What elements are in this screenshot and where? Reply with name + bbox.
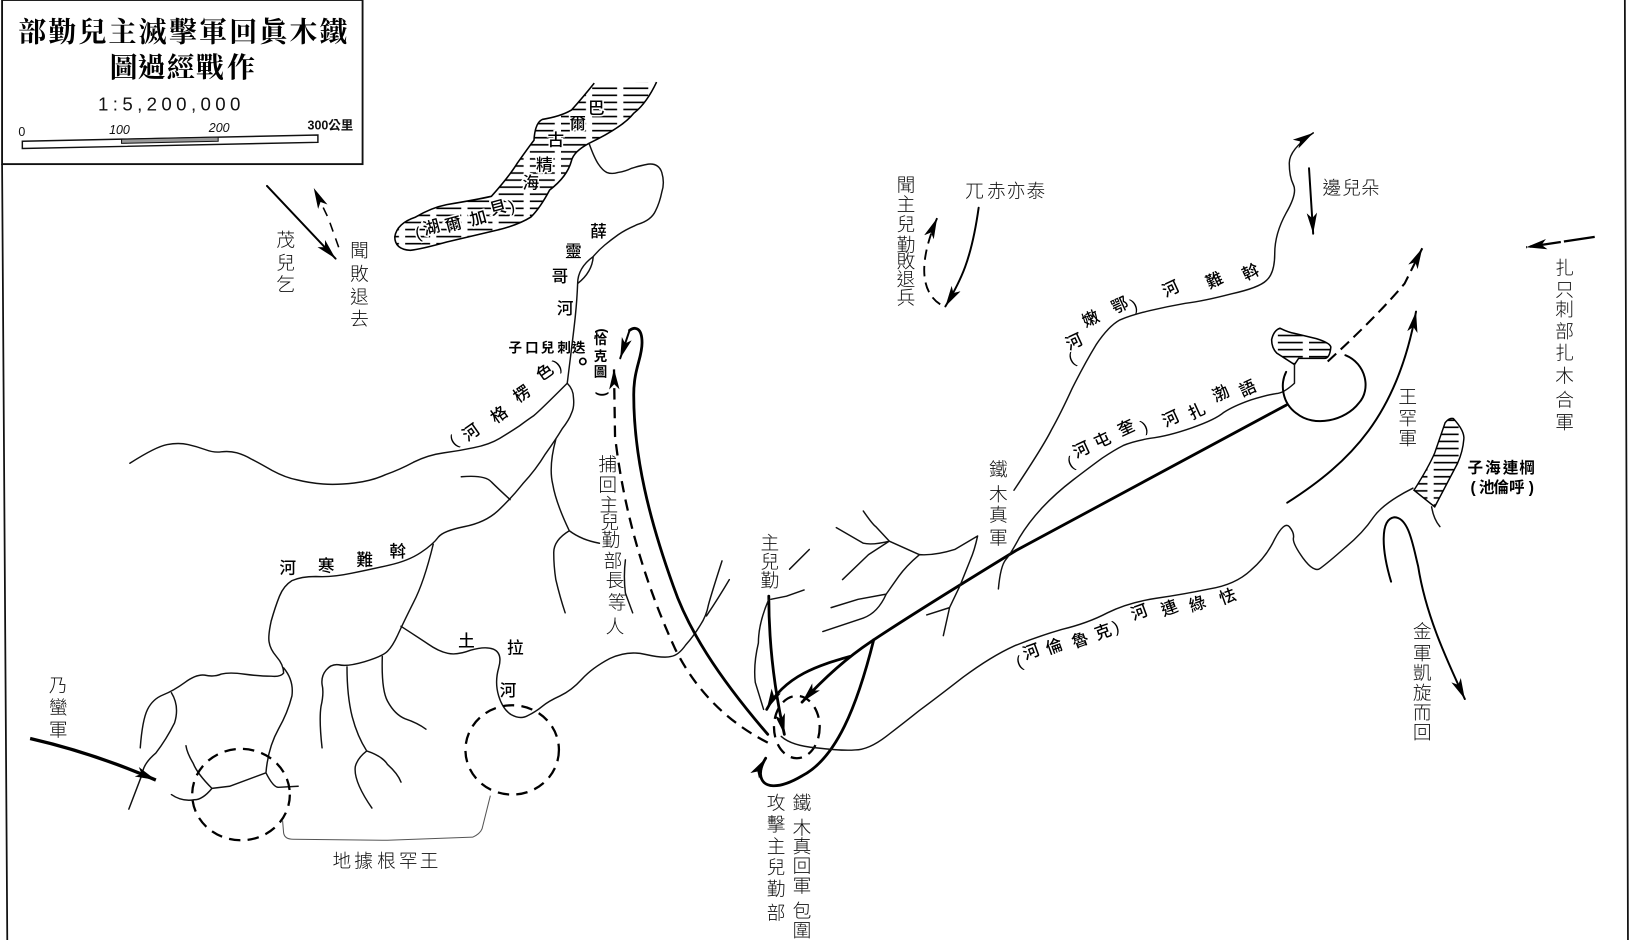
- arrow: pursuit returning with Jurkin chiefs: [598, 328, 768, 743]
- arrow: Wang Khan army: [1287, 312, 1417, 503]
- label: Jurkin: 主兒勤: [760, 533, 779, 591]
- label: Onon Han river name: 斡難寒河: [279, 542, 407, 578]
- label: Jamukha army: 扎只刺部扎木合軍: [1555, 257, 1574, 433]
- heading: map title line one: 部勤兒主滅擊軍回眞木鐵: [18, 17, 348, 49]
- river: Selenga: [130, 143, 663, 484]
- arrow: Temujin army main advance: [802, 405, 1286, 702]
- river: Kherlen: [781, 488, 1413, 750]
- place label: Kyakhta and Deliun Boldog: 子口兒刺迭: [509, 339, 586, 355]
- label: captured Jurkin chiefs: 捕回主兒勤部長等人: [598, 454, 626, 637]
- label: Onon river: (河嫩鄂)河難斡: [1063, 260, 1263, 369]
- scale bar: [18, 119, 353, 149]
- river: Tula: [401, 561, 729, 717]
- panel: title and scale: [2, 0, 363, 164]
- arrows: Taichiut advance and retreat: [897, 174, 1045, 309]
- arrow: Naiman army: [30, 675, 156, 780]
- scale bar: 200: [208, 121, 230, 135]
- arrow: Jin army triumphant return: [1384, 517, 1465, 743]
- place label: Kyakhta and Deliun Boldog: [509, 329, 610, 396]
- label: Tula river name: 土拉河: [458, 631, 524, 700]
- label: Merkit: 茂兒乞: [276, 229, 295, 295]
- label: Wang Khan base: 地據根罕王: [332, 851, 438, 872]
- label: retreat on hearing of Jurkin defeat: 聞主兒勤敗退兵: [897, 174, 916, 309]
- lake: Hulun: [1414, 418, 1535, 527]
- label: lake name: [413, 99, 605, 243]
- text: map scale ratio: 1:5,200,000: [98, 93, 245, 114]
- arrows: Merkit advance and retreat: [267, 186, 369, 329]
- label: Bo'orchu river: (河屯奎)河扎渤語: [1064, 376, 1260, 472]
- label: Temujin returned and encircled: 鐵木真回軍包圍: [793, 792, 812, 940]
- label: Selenga river name: (河格楞色): [446, 356, 565, 450]
- label: lake name: 巴爾古精海: [523, 99, 605, 192]
- label: Naiman army: 乃蠻軍: [49, 675, 68, 741]
- arrow: Temujin encircling loop: [760, 640, 874, 940]
- label: defeated and withdrew: 聞敗退去: [350, 240, 369, 329]
- label: Hulun lake: 子海連棡: [1467, 459, 1535, 477]
- lake and river: Bo'orchu and Tatu: [998, 328, 1331, 589]
- lake: Baikal: [395, 82, 657, 250]
- label: lake name: (湖爾加貝): [413, 196, 517, 243]
- place label: Kyakhta and Deliun Boldog: (恰克圖): [594, 329, 610, 396]
- circle: destination loop with dashed exit arrow: [1283, 248, 1422, 421]
- river: Onon-Kherlen west branches: [129, 383, 729, 809]
- label: Bian Er Duo: 邊兒朵: [1323, 178, 1380, 198]
- arrow: Jamukha army: [1526, 237, 1595, 433]
- scale bar: 0: [18, 125, 25, 139]
- label: Taichiut: 兀赤亦泰: [965, 181, 1045, 202]
- label: Temujin army: 鐵木真軍: [989, 459, 1008, 549]
- label: Selenga river name: [446, 222, 607, 450]
- river: Onon upper: [1014, 133, 1313, 490]
- label: Selenga river name: 薛靈哥河: [552, 222, 607, 318]
- label: attack on Jurkin: 攻擊主兒勤部: [767, 792, 785, 923]
- label: Wang Khan army: 王罕軍: [1398, 386, 1417, 449]
- scale bar: 100: [109, 123, 130, 137]
- heading: map title line two: 圖過經戰作: [110, 52, 255, 84]
- region: Wang Khan base circles: [192, 705, 559, 872]
- label: Hulun lake: (池倫呼): [1471, 478, 1534, 497]
- label: Hulun lake: [1467, 459, 1535, 497]
- arrow: Borjigin Bian Er Duo: [1309, 168, 1380, 234]
- river tributaries: central: [823, 511, 978, 636]
- scale bar: 300公里: [308, 119, 353, 133]
- label: Kherlen river: (河倫魯克)河連綠怯: [1013, 585, 1239, 672]
- arrow: Jurkin movement: [755, 533, 809, 734]
- label: Jin army returned: 金軍凱旋而回: [1413, 621, 1432, 743]
